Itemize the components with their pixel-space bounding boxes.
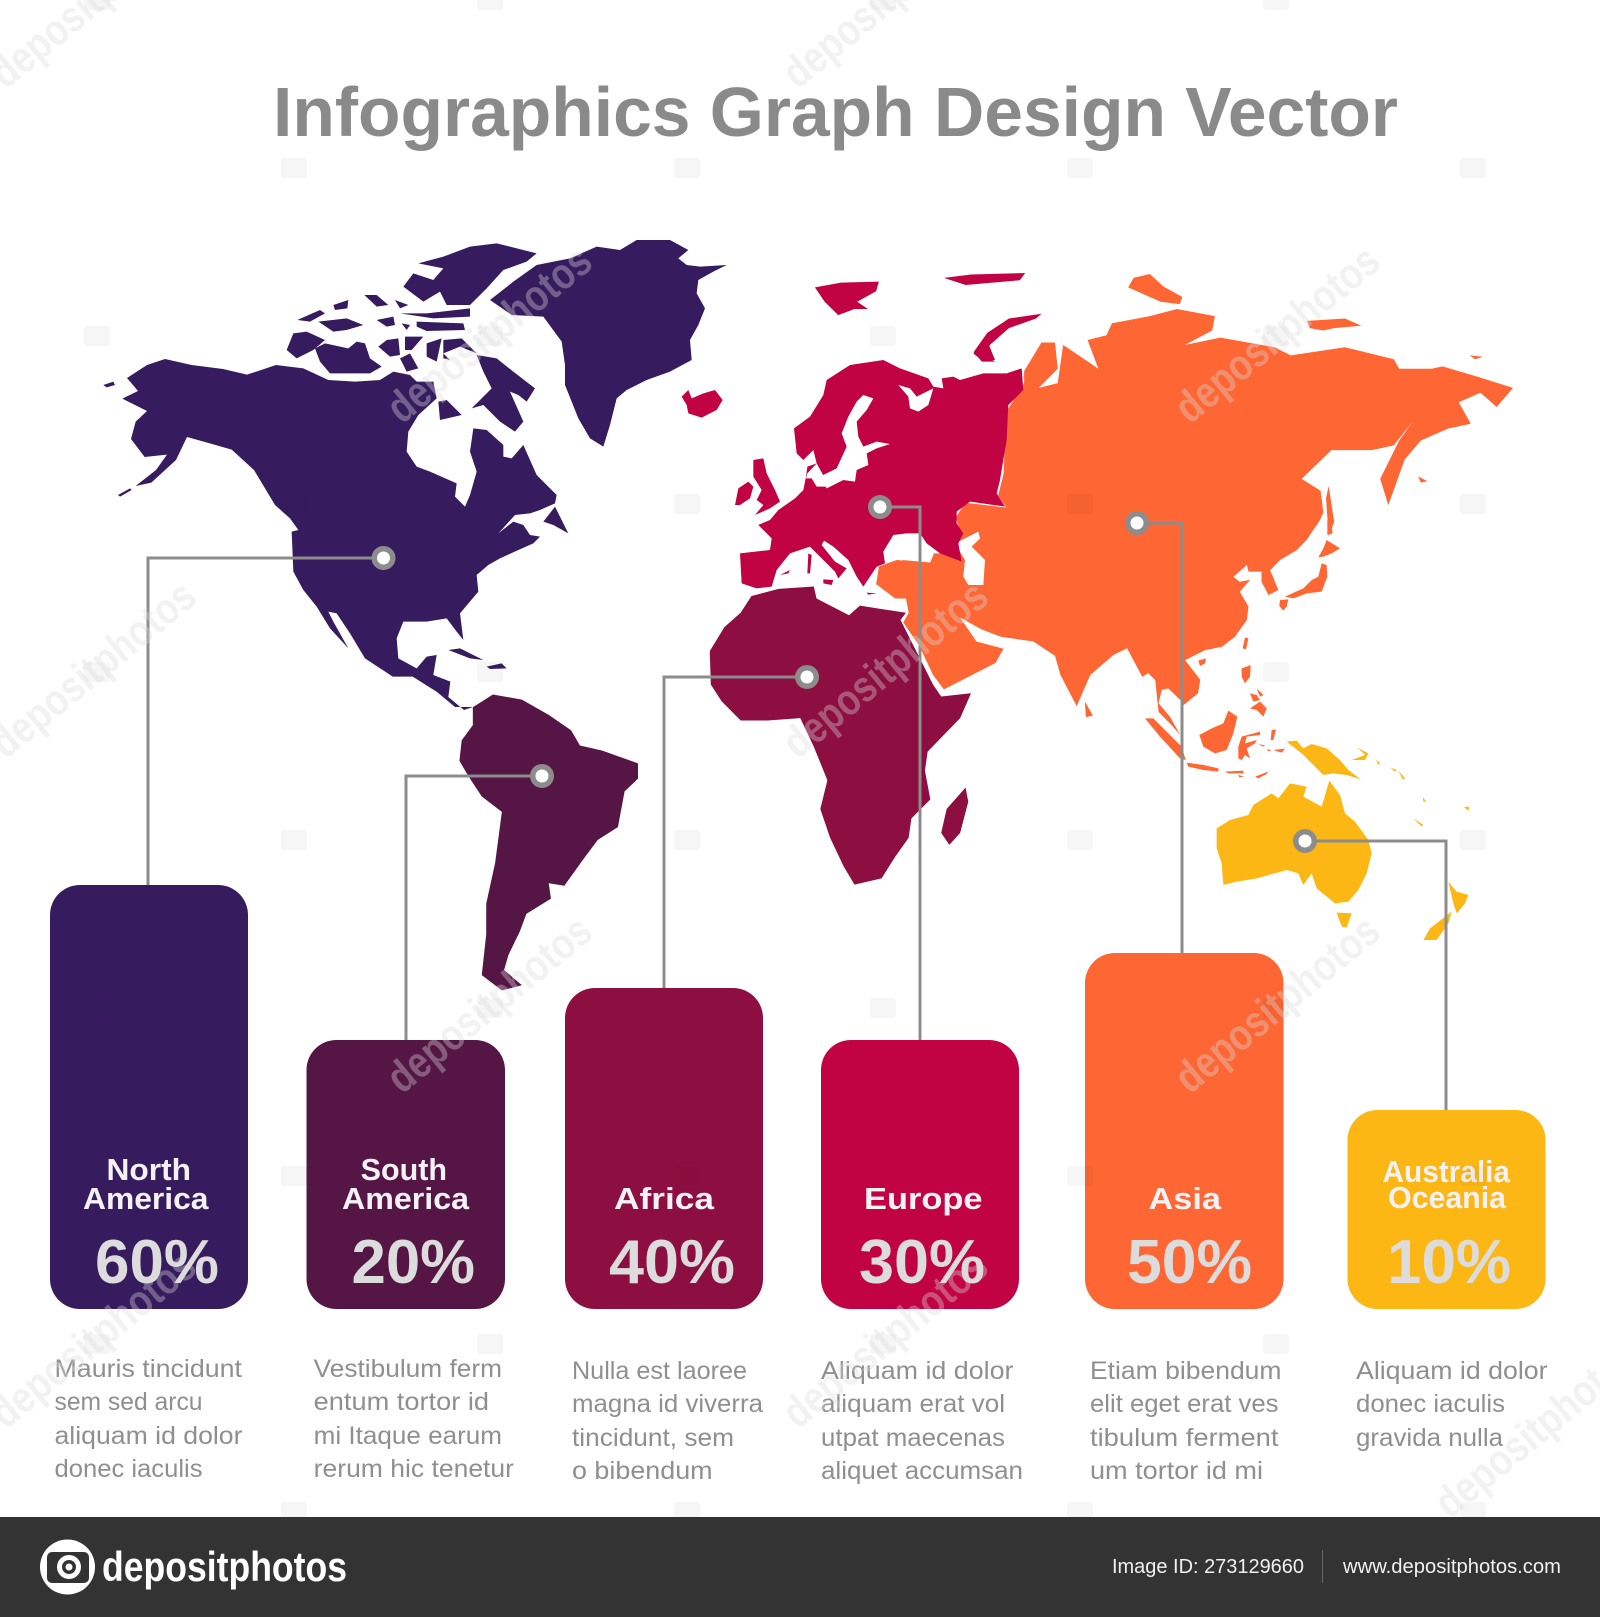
- bar: Europe: 30%: [859, 1228, 985, 1297]
- bar: South America: South: [361, 1152, 447, 1187]
- bar: North America: 60%: [95, 1228, 219, 1297]
- description: Africa: tincidunt, sem: [572, 1424, 734, 1452]
- bar: South America: [306, 1040, 505, 1309]
- pin: North America: [372, 546, 396, 570]
- map: Australia and Oceania: [1217, 741, 1469, 940]
- footer logo text: depositphotos: [102, 1543, 347, 1590]
- pin: Africa: [795, 665, 819, 689]
- pin: Europe: [868, 495, 892, 519]
- description: Europe: aliquam erat vol: [821, 1390, 1005, 1418]
- bar: Europe: Europe: [864, 1181, 982, 1216]
- bar: South America: America: [342, 1181, 470, 1216]
- pin: South America: [530, 764, 554, 788]
- website: www.depositphotos.com: [1342, 1556, 1561, 1578]
- description: Australia: gravida nulla: [1356, 1424, 1503, 1452]
- connector lines: [148, 507, 1446, 1110]
- bar: Europe: [821, 1040, 1019, 1309]
- description: Europe: utpat maecenas: [821, 1424, 1005, 1452]
- world map: [103, 240, 1513, 990]
- description: Africa: magna id viverra: [572, 1390, 763, 1418]
- bar: Australia Oceania: [1348, 1110, 1546, 1309]
- description: Asia: elit eget erat ves: [1090, 1390, 1278, 1418]
- description: Europe: aliquet accumsan: [821, 1457, 1023, 1485]
- pin: Asia: [1125, 511, 1149, 535]
- map: South America: [459, 694, 638, 990]
- watermarks: depositphotos: [773, 1241, 997, 1438]
- description: Asia: um tortor id mi: [1090, 1457, 1263, 1485]
- bar: South America: 20%: [352, 1228, 475, 1297]
- description: Asia: tibulum ferment: [1090, 1424, 1279, 1452]
- bar: Africa: [565, 988, 763, 1309]
- description: Asia: Etiam bibendum: [1090, 1357, 1282, 1385]
- description: Europe: Aliquam id dolor: [821, 1357, 1014, 1385]
- description: South America: entum tortor id: [314, 1388, 489, 1416]
- map: Europe: [682, 273, 1041, 595]
- description: North America: [54, 1355, 243, 1483]
- description: Europe: [821, 1357, 1023, 1485]
- image id: Image ID: 273129660: [1112, 1556, 1304, 1578]
- watermarks: depositphotos: [1165, 906, 1389, 1103]
- bar: North America: America: [83, 1181, 209, 1216]
- bar: Australia Oceania: Australia: [1382, 1154, 1511, 1189]
- map: North America: [103, 240, 727, 710]
- description: South America: Vestibulum ferm: [314, 1355, 502, 1383]
- watermarks: depositphotos: [773, 571, 997, 768]
- pin: Australia: [1293, 829, 1317, 853]
- watermarks: depositphotos: [377, 236, 601, 433]
- description: Africa: [572, 1357, 763, 1485]
- bar: Africa: 40%: [609, 1228, 735, 1297]
- description: North America: Mauris tincidunt: [54, 1355, 242, 1383]
- map: Asia: [876, 274, 1513, 778]
- description: South America: mi Itaque earum: [314, 1422, 502, 1450]
- icon: camera logo: [40, 1540, 95, 1594]
- title: Infographics Graph Design Vector: [273, 73, 1398, 151]
- map: Africa: [710, 586, 971, 885]
- bar: Africa: Africa: [614, 1181, 715, 1216]
- bar: Australia Oceania: Oceania: [1388, 1180, 1507, 1215]
- description: North America: donec iaculis: [54, 1455, 202, 1483]
- description: North America: sem sed arcu: [54, 1388, 202, 1416]
- description: South America: rerum hic tenetur: [314, 1455, 514, 1483]
- description: Australia: Aliquam id dolor: [1356, 1357, 1548, 1385]
- description: Africa: o bibendum: [572, 1457, 713, 1485]
- description: South America: [314, 1355, 514, 1483]
- description: Africa: Nulla est laoree: [572, 1357, 747, 1385]
- bar: Asia: Asia: [1148, 1181, 1222, 1216]
- bar: North America: North: [106, 1152, 191, 1187]
- footer bar: [0, 1517, 1600, 1617]
- description: Australia: [1356, 1357, 1548, 1452]
- bar: Asia: [1085, 953, 1284, 1309]
- bar: Asia: 50%: [1127, 1228, 1252, 1297]
- description: Australia: donec iaculis: [1356, 1390, 1505, 1418]
- bar: North America: [50, 885, 248, 1309]
- description: Asia: [1090, 1357, 1282, 1485]
- bar: Australia Oceania: 10%: [1387, 1228, 1511, 1297]
- watermarks: depositphotos: [1165, 236, 1389, 433]
- description: North America: aliquam id dolor: [54, 1422, 243, 1450]
- watermarks: depositphotos: [377, 906, 601, 1103]
